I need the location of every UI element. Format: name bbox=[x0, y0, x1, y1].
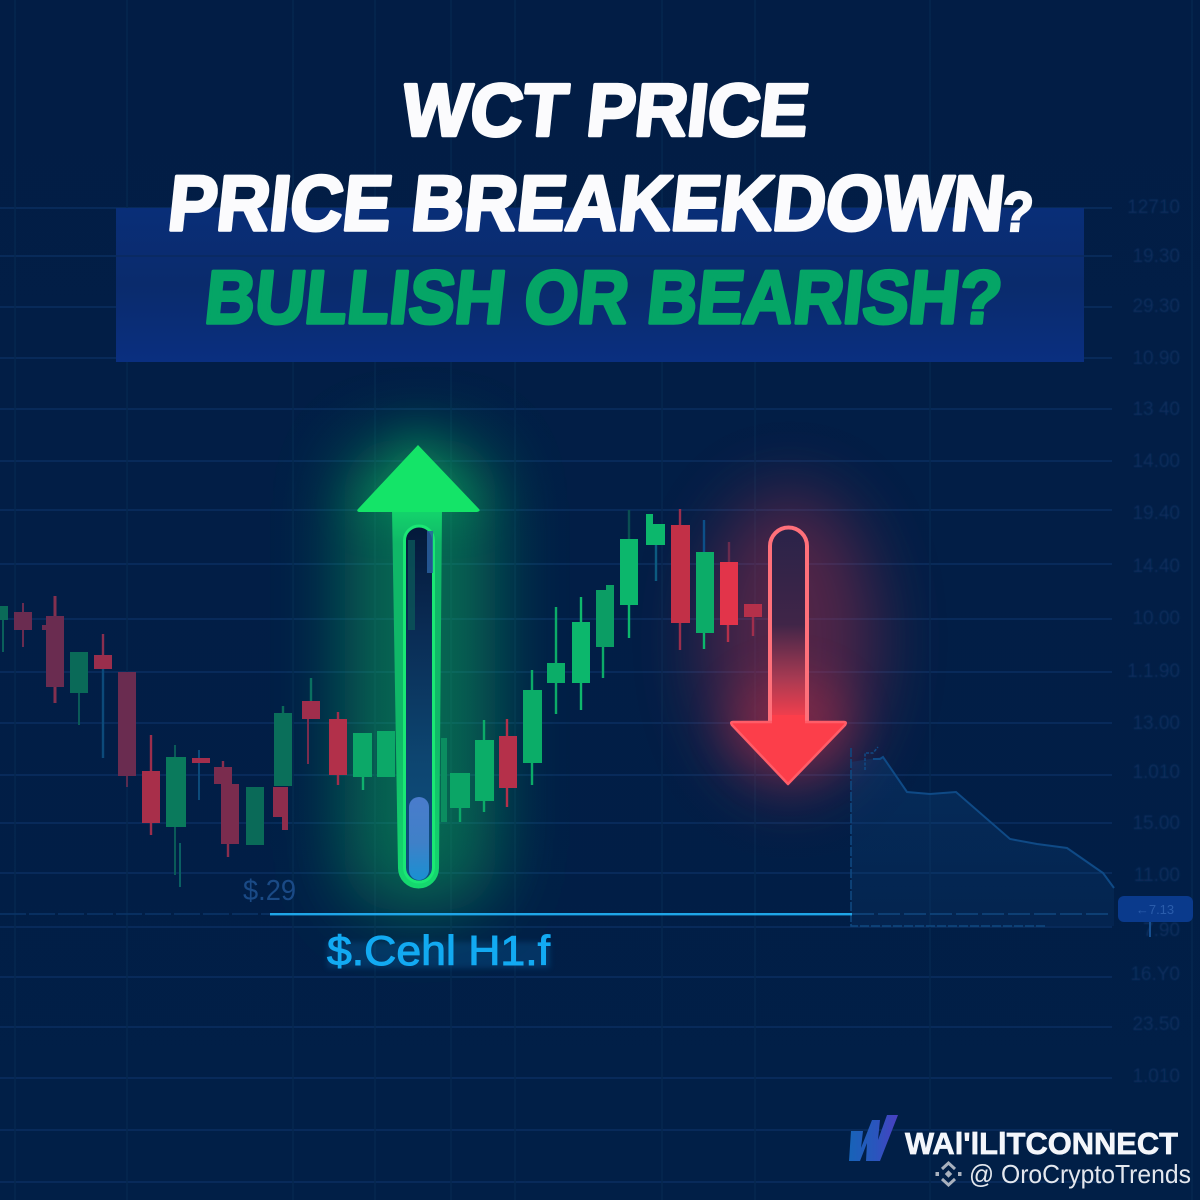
axis price labels: 13 40 bbox=[1132, 399, 1180, 420]
axis price labels: 16.Y0 bbox=[1130, 964, 1180, 985]
axis price labels: 13.00 bbox=[1132, 713, 1180, 734]
price badge: ←7.13 bbox=[1136, 902, 1174, 917]
axis price labels: 1.1.90 bbox=[1127, 661, 1180, 682]
icon: W mark bbox=[849, 1115, 898, 1161]
subtitle: bullish or bearish: BULLISH OR BEARISH? bbox=[201, 255, 1006, 339]
axis price labels: 19.30 bbox=[1132, 246, 1180, 267]
label: $.29: $.29 bbox=[243, 875, 296, 907]
icon: Binance diamond bbox=[936, 1163, 962, 1185]
logo wordmark: WAl'lLlTCONNECT bbox=[905, 1126, 1178, 1161]
price support line bbox=[0, 913, 1110, 915]
candles: peak and reversal section bbox=[620, 509, 762, 650]
candlestick chart bbox=[0, 509, 762, 887]
green arrow glow bbox=[345, 430, 495, 910]
axis price labels: 15.00 bbox=[1132, 813, 1180, 834]
axis price labels: 12710 bbox=[1127, 197, 1180, 218]
projection area chart bbox=[851, 747, 1114, 926]
price badge bbox=[1118, 896, 1193, 937]
axis price labels: 7.90 bbox=[1143, 920, 1180, 941]
icon: green up arrow bbox=[357, 445, 480, 888]
candles: recovery section bbox=[274, 585, 614, 822]
axis price labels: 29.30 bbox=[1132, 296, 1180, 317]
title: PRICE BREAKEKDOWN?: ? bbox=[999, 180, 1036, 243]
candles: falling section bbox=[0, 596, 288, 887]
title: PRICE BREAKEKDOWN?: PRICE BREAKEKDOWN bbox=[164, 159, 1009, 247]
axis price labels: 11.00 bbox=[1134, 865, 1180, 886]
axis price labels: 1.010 bbox=[1132, 762, 1180, 783]
label: $.Cehl H1.f: $.Cehl H1.f bbox=[327, 927, 550, 974]
title: WCT PRICE: WCT PRICE bbox=[398, 69, 813, 151]
watermark: OroCryptoTrends bbox=[936, 1159, 1191, 1189]
icon: red down arrow bbox=[731, 528, 846, 784]
axis price labels: 19.40 bbox=[1132, 503, 1180, 524]
red arrow glow bbox=[705, 490, 875, 790]
axis price labels: 14.00 bbox=[1132, 451, 1180, 472]
axis price labels: 14.40 bbox=[1132, 556, 1180, 577]
axis price labels bbox=[1127, 197, 1180, 1087]
title banner bbox=[116, 208, 1084, 362]
axis price labels: 1.010 bbox=[1132, 1066, 1180, 1087]
axis price labels: 10.00 bbox=[1132, 608, 1180, 629]
axis price labels: 23.50 bbox=[1132, 1014, 1180, 1035]
handle text: @ OroCryptoTrends bbox=[969, 1159, 1191, 1189]
axis price labels: 10.90 bbox=[1132, 348, 1180, 369]
logo: WalletConnect bbox=[849, 1115, 1178, 1161]
